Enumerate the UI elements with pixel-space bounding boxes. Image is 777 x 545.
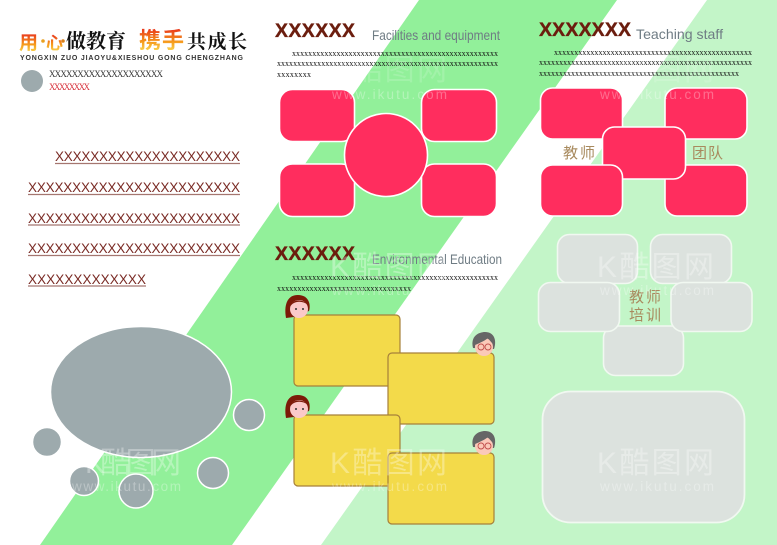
- large grey panel: [542, 392, 744, 522]
- heading: teaching staff: [539, 19, 723, 42]
- icon: man face: [472, 431, 495, 455]
- left intro text block: XXXXXXXXXXXXXXXXXXXXXXXX: [28, 180, 240, 195]
- logo heading: 做教育: [66, 25, 126, 54]
- icon: man face: [472, 332, 495, 356]
- watermarks: K酷图网: [85, 447, 181, 480]
- text: environmental education: xxxxxxxxxxxxxxxxxxxxxxxxxxxxxxxxxxxxxxxxxxxxxxxxxxx: [292, 273, 498, 282]
- logo heading: 携手: [139, 28, 184, 53]
- label: teacher training: [629, 289, 661, 324]
- watermarks: www.ikutu.com: [599, 87, 714, 102]
- text: facilities: [277, 49, 498, 79]
- logo heading: 用: [19, 33, 38, 54]
- watermarks: K酷图网: [597, 251, 714, 284]
- label: teacher training: 培训: [629, 307, 661, 324]
- text: teaching staff: xxxxxxxxxxxxxxxxxxxxxxxxxxxxxxxxxxxxxxxxxxxxxxxxxx: [539, 69, 739, 78]
- diagram: teaching team: [540, 88, 747, 216]
- background: green diagonal stripe: [40, 0, 617, 545]
- watermarks: K酷图网: [597, 54, 714, 87]
- icon: girl face: [285, 295, 310, 318]
- logo heading: 心: [46, 34, 63, 53]
- watermarks: K酷图网: [330, 54, 447, 87]
- logo heading: 共成长: [187, 27, 247, 54]
- left intro text block: XXXXXXXXXXXXXXXXXXXXXXXX: [28, 241, 240, 256]
- contact text: XXXXXXXXXXXXXXXXXXXX: [49, 69, 164, 79]
- left intro text block: XXXXXXXXXXXXXXXXXXXXX: [55, 149, 240, 164]
- label: teachers: 教师: [563, 145, 595, 162]
- text: teaching staff: xxxxxxxxxxxxxxxxxxxxxxxxxxxxxxxxxxxxxxxxxxxxxxxxxxxxx: [539, 58, 752, 67]
- text: facilities: xxxxxxxx: [277, 70, 311, 79]
- watermarks: www.ikutu.com: [331, 479, 447, 494]
- watermarks: K酷图网: [330, 251, 447, 284]
- left intro text block: XXXXXXXXXXXXX: [28, 272, 146, 287]
- watermarks: [71, 54, 714, 494]
- heading: facilities: [275, 20, 500, 43]
- label: teacher training: 教师: [629, 289, 661, 306]
- watermarks: K酷图网: [330, 447, 447, 480]
- yellow card group: [294, 315, 494, 524]
- heading: facilities: XXXXXX: [275, 20, 355, 42]
- watermarks: www.ikutu.com: [599, 479, 714, 494]
- diagram: facilities: [280, 90, 496, 216]
- heading: environmental education: Environmental Education: [372, 251, 502, 267]
- text: teaching staff: xxxxxxxxxxxxxxxxxxxxxxxxxxxxxxxxxxxxxxxxxxxxxxxxx: [554, 48, 752, 57]
- contact text: XXXXXXXX: [49, 82, 90, 92]
- watermarks: www.ikutu.com: [331, 283, 447, 298]
- logo heading: YONGXIN ZUO JIAOYU&XIESHOU GONG CHENGZHANG: [20, 55, 244, 62]
- bubble cluster: [32, 326, 264, 508]
- text: facilities: xxxxxxxxxxxxxxxxxxxxxxxxxxxxxxxxxxxxxxxxxxxxxxxxxxx: [292, 49, 498, 58]
- watermarks: www.ikutu.com: [599, 283, 714, 298]
- text: facilities: xxxxxxxxxxxxxxxxxxxxxxxxxxxxxxxxxxxxxxxxxxxxxxxxxxxxxxx: [277, 59, 498, 68]
- diagram: teacher training: [538, 234, 752, 376]
- icon: girl face: [285, 395, 310, 418]
- heading: environmental education: XXXXXX: [275, 243, 355, 265]
- heading: teaching staff: XXXXXXX: [539, 19, 631, 41]
- left intro text block: XXXXXXXXXXXXXXXXXXXXXXXX: [28, 211, 240, 226]
- logo heading: [19, 25, 247, 62]
- contact text: [49, 69, 164, 92]
- text: environmental education: xxxxxxxxxxxxxxxxxxxxxxxxxxxxxxxxx: [277, 284, 411, 293]
- heading: environmental education: [275, 243, 502, 267]
- logo contact circle: [21, 70, 43, 92]
- text: environmental education: [277, 273, 498, 293]
- watermarks: www.ikutu.com: [331, 87, 447, 102]
- left intro text block: [28, 149, 240, 287]
- heading: facilities: Facilities and equipment: [372, 27, 500, 43]
- background: pale green diagonal area: [321, 0, 777, 545]
- label: team: 团队: [692, 145, 723, 162]
- heading: teaching staff: Teaching staff: [636, 26, 723, 42]
- text: teaching staff: [539, 48, 752, 78]
- watermarks: www.ikutu.com: [71, 479, 181, 494]
- watermarks: K酷图网: [597, 447, 714, 480]
